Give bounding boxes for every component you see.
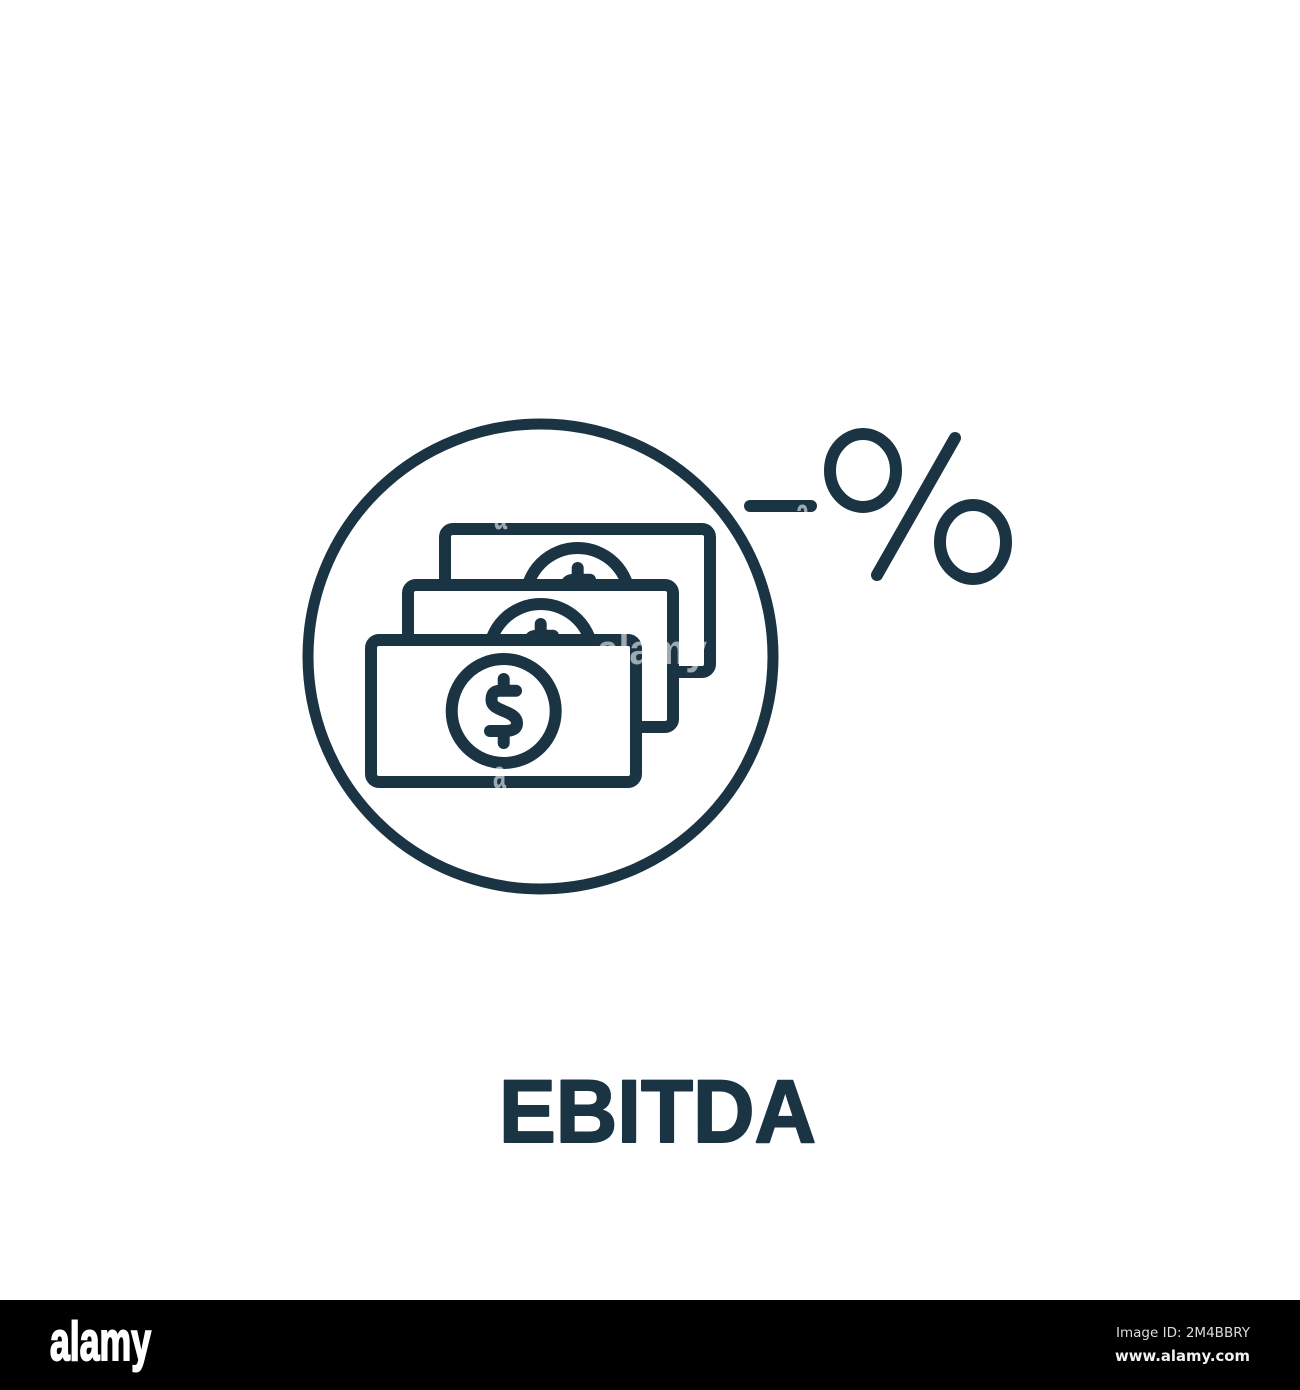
- watermark fragments: a: [493, 753, 506, 797]
- icon: dollar coin: [452, 659, 556, 763]
- title: EBITDA: [499, 1061, 816, 1161]
- icon: EBITDA money and percent: [308, 424, 1006, 889]
- icon: minus sign: [750, 500, 811, 512]
- icon: middle banknote: [408, 585, 673, 727]
- image id: Image ID: 2M4BBRY: [1116, 1325, 1251, 1341]
- watermark fragments: [493, 491, 809, 797]
- watermark fragments: a: [494, 494, 507, 538]
- footer bar: [0, 1300, 1300, 1390]
- icon: large circle: [308, 424, 773, 889]
- logo: alamy: alamy: [50, 1310, 151, 1372]
- icon: front banknote: [371, 640, 636, 782]
- icon: percent sign: [830, 434, 1006, 579]
- icon: dollar sign: [490, 679, 517, 743]
- website: www.alamy.com: [1115, 1347, 1250, 1365]
- watermark fragments: alamy: [597, 626, 708, 673]
- watermark fragments: a: [796, 491, 809, 535]
- icon: back banknote: [445, 529, 710, 672]
